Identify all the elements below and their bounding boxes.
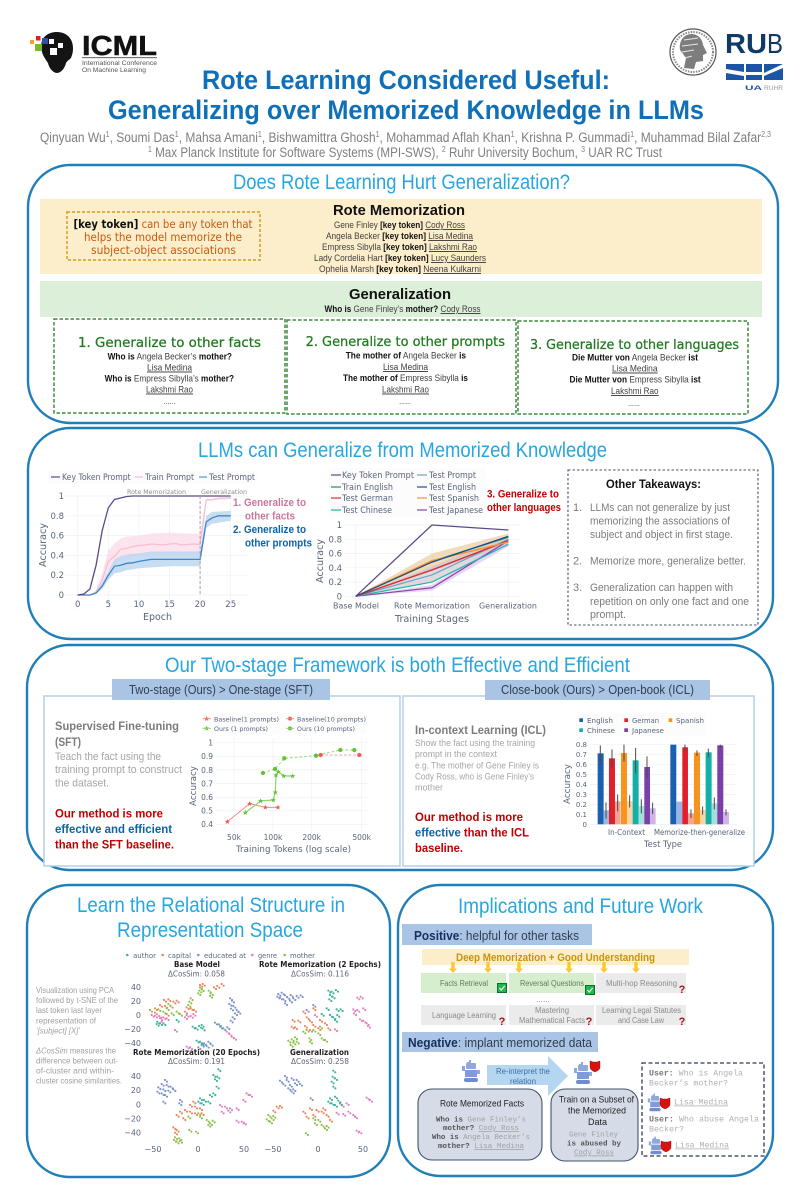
- box: generalize to other facts: Who is Angela Becker’s mother?: [108, 352, 232, 362]
- heading: [77, 894, 345, 942]
- chart: accuracy vs training tokens: 0.9: [201, 752, 213, 761]
- authors and affiliations: [40, 130, 771, 160]
- explanation text: of-cluster and within-: [36, 1066, 114, 1076]
- authors and affiliations: , Soumi Das: [110, 130, 175, 145]
- box: generalize to other languages: Lakshmi Rao: [611, 386, 659, 397]
- explanation text: ΔCosSim measures the: [35, 1046, 116, 1056]
- annotations: facts and prompts: other facts: [245, 510, 295, 522]
- authors and affiliations: , Krishna P. Gummadi: [515, 130, 630, 145]
- panel: relational structure: [27, 885, 390, 1177]
- chart: t-SNE generalization: Generalization: [290, 1048, 349, 1057]
- chart: t-SNE rote memorization 20 epochs: 40: [131, 1072, 141, 1081]
- chart: t-SNE rote memorization 20 epochs: 0: [195, 1145, 201, 1154]
- explanation text: representation of: [36, 1016, 97, 1026]
- box: other takeaways: LLMs can not generalize by just: [590, 502, 730, 514]
- callout: key token: [key token] can be any token that: [74, 217, 253, 231]
- panel: two-stage framework: [27, 645, 773, 870]
- generalization band: Who is Gene Finley’s mother? Cody Ross: [324, 304, 481, 315]
- heading: LLMs can Generalize from Memorized Knowledge: [198, 439, 607, 462]
- box: generalize to other languages: Die Mutter von Empress Sibylla ist: [570, 374, 701, 386]
- sub-panel: ICL comparison: Our method is more: [415, 810, 523, 824]
- legend: t-SNE relations: author: [133, 952, 156, 960]
- band: deep memorization: [422, 949, 689, 965]
- box: generalize to other prompts: 2. Generalize to other prompts: [306, 335, 505, 350]
- bubble: train on a subset: is abused by: [567, 1140, 621, 1148]
- generalization band: Generalization: [349, 286, 451, 303]
- explanation text: followed by t-SNE of the: [36, 995, 118, 1005]
- logo: RUB UA Ruhr: B: [767, 28, 783, 59]
- chart: accuracy vs training tokens: Ours (1 prompts): [214, 725, 268, 733]
- explanation text: [35, 985, 122, 1086]
- authors and affiliations: Ruhr University Bochum,: [446, 145, 581, 160]
- bubble: train on a subset: the Memorized: [568, 1106, 626, 1116]
- chart: accuracy vs training tokens: 1: [208, 738, 213, 748]
- chart: accuracy by training stage: 0: [337, 592, 342, 602]
- chart: accuracy by training stage: Generalization: [479, 602, 537, 610]
- box: generalize to other facts: Who is Empress Sibylla’s mother?: [105, 374, 234, 384]
- authors and affiliations: 3: [581, 145, 585, 154]
- bubble: rote memorized facts: Who is Angela Becker’s: [432, 1134, 530, 1142]
- legend: t-SNE relations: [126, 952, 315, 960]
- chart: t-SNE generalization: 50: [358, 1145, 368, 1154]
- chart: accuracy by epoch: 0.6: [50, 532, 64, 542]
- task grid: Mathematical Facts: [519, 1016, 585, 1025]
- generalization band: [40, 281, 762, 317]
- rote memorization band: Angela Becker [key token] Lisa Medina: [326, 231, 474, 242]
- chart: accuracy by training stage: Test Japanese: [428, 506, 483, 516]
- annotations: facts and prompts: 2. Generalize to: [233, 524, 306, 536]
- explanation text: Visualization using PCA: [36, 985, 114, 995]
- arrow: re-interpret the relation: Re-interpret the: [496, 1067, 551, 1076]
- rote memorization band: Rote Memorization: [333, 202, 465, 219]
- legend: t-SNE relations: capital: [168, 952, 191, 960]
- authors and affiliations: 2,3: [761, 130, 771, 139]
- sub-panel: SFT comparison: Supervised Fine-tuning: [55, 719, 179, 733]
- chart: accuracy by epoch: 1: [59, 492, 64, 502]
- heading: Representation Space: [117, 919, 303, 942]
- chart: accuracy by epoch: Accuracy: [38, 523, 49, 567]
- box: generalize to other prompts: The mother of Empress Sibylla is: [343, 373, 468, 384]
- chart: accuracy vs training tokens: Ours (10 prompts): [297, 725, 355, 733]
- box: other takeaways: memorizing the associations of: [590, 516, 731, 528]
- box: generalize to other prompts: Lisa Medina: [383, 362, 429, 373]
- chart: accuracy by training stage: Test German: [341, 494, 393, 504]
- chart: accuracy by epoch: 0.2: [50, 571, 64, 581]
- chart: accuracy by epoch: 10: [133, 600, 144, 610]
- chart: accuracy vs training tokens: 0.7: [201, 780, 213, 788]
- sub-panel: SFT comparison: training prompt to construct: [55, 764, 182, 776]
- authors and affiliations: 1: [630, 130, 635, 139]
- box: other takeaways: 3.: [573, 582, 582, 594]
- chart: accuracy by test type: German: [632, 717, 659, 725]
- chart: t-SNE rote memorization 20 epochs: [124, 1048, 260, 1154]
- chart: accuracy by training stage: 0.8: [328, 535, 342, 545]
- chart: accuracy vs training tokens: Accuracy: [189, 765, 199, 806]
- title: Rote Learning Considered Useful:: [202, 65, 610, 95]
- chart: t-SNE base model: Base Model: [174, 960, 220, 969]
- rote memorization band: Ophelia Marsh [key token] Neena Kulkarni: [319, 264, 481, 275]
- sub-panel: ICL comparison: e.g. The mother of Gene Finley is: [415, 760, 539, 772]
- box: example dialogue: User: Who is Angela: [649, 1070, 743, 1078]
- chart: accuracy vs training tokens: Training Tokens (log scale): [235, 845, 351, 855]
- arrows: yellow down: [449, 962, 640, 973]
- chart: t-SNE rote memorization 20 epochs: 20: [131, 1086, 141, 1095]
- chart: accuracy vs training tokens: Baseline(1 prompts): [214, 716, 279, 724]
- chart: t-SNE rote memorization 20 epochs: 0: [136, 1100, 141, 1110]
- callout: key token: subject-object associations: [91, 243, 236, 257]
- chart: accuracy by epoch: 25: [225, 600, 236, 610]
- chart: accuracy vs training tokens: [189, 713, 372, 855]
- box: generalize to other languages: 3. Generalize to other languages: [530, 338, 739, 353]
- box: other takeaways: Memorize more, generalize better.: [590, 556, 746, 568]
- chart: accuracy vs training tokens: 0.6: [201, 793, 213, 802]
- chart: accuracy by training stage: 0.6: [328, 550, 342, 560]
- explanation text: cluster cosine similarities.: [36, 1076, 122, 1086]
- arrow: re-interpret the relation: relation: [510, 1077, 536, 1086]
- callout: key token: [67, 212, 260, 260]
- rote memorization band: [40, 199, 762, 275]
- task grid: Multi-hop Reasoning: [606, 979, 677, 988]
- logo: RUB UA Ruhr: RU: [725, 28, 767, 59]
- box: generalize to other prompts: The mother of Angela Becker is: [346, 350, 466, 362]
- authors and affiliations: 2: [442, 145, 446, 154]
- chart: accuracy by test type: 0: [583, 821, 587, 829]
- chart: t-SNE rote memorization 2 epochs: Rote Memorization (2 Epochs): [259, 960, 381, 969]
- task grid: Facts Retrieval: [440, 979, 488, 988]
- chart: t-SNE generalization: −50: [265, 1145, 281, 1154]
- chart: accuracy by epoch: Train Prompt: [144, 473, 195, 483]
- title: [108, 65, 704, 125]
- heading: Learn the Relational Structure in: [77, 894, 345, 917]
- chart: t-SNE base model: 0: [136, 1011, 141, 1020]
- chart: accuracy by epoch: Generalization: [201, 489, 247, 496]
- chart: accuracy by test type: 0.1: [576, 811, 587, 819]
- annotations: facts and prompts: [233, 497, 312, 550]
- chart: accuracy by test type: [563, 713, 745, 850]
- tab: positive: [402, 924, 592, 945]
- box: other takeaways: subject and object in first stage.: [590, 529, 733, 541]
- chart: t-SNE rote memorization 20 epochs: −40: [124, 1128, 141, 1138]
- logo: RUB UA Ruhr: UA: [745, 85, 763, 92]
- authors and affiliations: Qinyuan Wu: [40, 130, 114, 145]
- sub-panel: SFT comparison: (SFT): [55, 735, 81, 749]
- chart: t-SNE base model: −20: [124, 1025, 141, 1034]
- chart: accuracy by epoch: Epoch: [143, 612, 172, 623]
- chart: accuracy by epoch: Test Prompt: [208, 473, 256, 483]
- chart: accuracy by training stage: Test Prompt: [428, 471, 477, 481]
- chart: accuracy by epoch: 0: [59, 591, 64, 601]
- box: example dialogue: User: Who abuse Angela: [649, 1116, 759, 1124]
- logo: Max Planck: [670, 29, 716, 75]
- box: example dialogue: [642, 1063, 764, 1156]
- annotations: facts and prompts: other prompts: [245, 538, 312, 550]
- chart: accuracy by training stage: Test Chinese: [341, 506, 392, 516]
- chart: accuracy by training stage: Training Stages: [394, 614, 469, 625]
- logo: ICML: International Conference: [82, 60, 157, 67]
- bubble: rote memorized facts: Rote Memorized Facts: [440, 1098, 524, 1110]
- title: Generalizing over Memorized Knowledge in LLMs: [108, 95, 704, 125]
- annotation: languages: other languages: [487, 502, 561, 514]
- sub-panel: ICL comparison: mother: [415, 782, 443, 794]
- tab: negative: Negative: implant memorized data: [408, 1035, 593, 1050]
- box: generalize to other facts: Lisa Medina: [147, 362, 193, 374]
- bubble: rote memorized facts: mother? Cody Ross: [443, 1125, 519, 1133]
- bubble: rote memorized facts: Who is Gene Finley’s: [436, 1116, 526, 1124]
- chart: accuracy by test type: Memorize-then-generalize: [654, 828, 745, 837]
- chart: t-SNE base model: −40: [124, 1039, 141, 1048]
- chart: accuracy by epoch: 5: [106, 600, 111, 610]
- task grid: Language Learning: [432, 1011, 496, 1020]
- authors and affiliations: 1: [511, 130, 515, 139]
- chart: accuracy by test type: Accuracy: [563, 763, 573, 804]
- sub-panel: ICL comparison: Close-book (Ours) > Open-book (ICL): [501, 683, 694, 697]
- bubble: train on a subset: Gene Finley: [569, 1132, 618, 1140]
- authors and affiliations: 1: [175, 130, 179, 139]
- authors and affiliations: 1: [258, 130, 262, 139]
- sub-panel: ICL comparison: baseline.: [415, 841, 463, 855]
- chart: t-SNE base model: [124, 960, 240, 1049]
- chart: accuracy by training stage: Key Token Prompt: [342, 471, 415, 481]
- chart: accuracy vs training tokens: 200k: [302, 833, 322, 842]
- bubble: train on a subset: [551, 1089, 638, 1161]
- sub-panel: ICL comparison: In-context Learning (ICL): [415, 723, 546, 737]
- chart: accuracy by test type: Japanese: [631, 727, 664, 735]
- explanation text: difference between out-: [36, 1056, 118, 1066]
- sub-panel: ICL comparison: [403, 680, 754, 866]
- sub-panel: SFT comparison: [44, 679, 400, 866]
- chart: accuracy vs training tokens: 0.8: [201, 766, 213, 775]
- legend: t-SNE relations: educated at: [204, 952, 246, 960]
- authors and affiliations: Max Planck Institute for Software Systems (MPI-SWS),: [152, 145, 442, 160]
- authors and affiliations: 1: [148, 145, 152, 154]
- chart: t-SNE rote memorization 20 epochs: ΔCosSim: 0.191: [168, 1057, 225, 1066]
- panel: does rote learning hurt generalization: [28, 165, 778, 423]
- annotation: languages: 3. Generalize to: [487, 488, 559, 500]
- logo: ICML: [30, 30, 157, 74]
- chart: t-SNE base model: 20: [131, 997, 141, 1006]
- box: example dialogue: Lisa Medina: [674, 1098, 728, 1108]
- heading: Implications and Future Work: [458, 895, 703, 918]
- chart: accuracy vs training tokens: 0.4: [201, 820, 213, 829]
- chart: accuracy by epoch: 15: [164, 600, 175, 610]
- authors and affiliations: 1: [106, 130, 110, 139]
- chart: accuracy by epoch: 0: [75, 600, 80, 610]
- box: generalize to other facts: ……: [163, 396, 176, 407]
- box: generalize to other prompts: ……: [399, 396, 411, 407]
- sub-panel: SFT comparison: Our method is more: [55, 806, 163, 820]
- task grid: Mastering: [535, 1006, 569, 1015]
- box: generalize to other languages: Die Mutter von Angela Becker ist: [572, 352, 699, 364]
- explanation text: ‘[subject] [X]’: [36, 1026, 80, 1036]
- task grid: and Case Law: [618, 1016, 664, 1025]
- sub-panel: SFT comparison: effective and efficient: [55, 822, 172, 836]
- explanation text: last token last layer: [36, 1005, 102, 1015]
- chart: accuracy vs training tokens: 500k: [352, 833, 372, 842]
- bubble: train on a subset: Data: [588, 1117, 608, 1128]
- task grid: Reversal Questions: [520, 979, 584, 988]
- chart: accuracy by training stage: Base Model: [333, 602, 379, 610]
- arrow: re-interpret the relation: [487, 1056, 568, 1096]
- band: deep memorization: Deep Memorization + Good Understanding: [456, 952, 655, 964]
- sub-panel: SFT comparison: Two-stage (Ours) > One-stage (SFT): [129, 683, 313, 697]
- chart: accuracy by training stage: Test English: [428, 483, 476, 493]
- chart: accuracy by training stage: 0.2: [328, 578, 342, 588]
- panel: LLMs can generalize: [28, 428, 773, 639]
- authors and affiliations: UAR RC Trust: [585, 145, 662, 160]
- sub-panel: ICL comparison: prompt in the context: [415, 749, 497, 760]
- sub-panel: ICL comparison: effective than the ICL: [415, 826, 529, 840]
- sub-panel: SFT comparison: than the SFT baseline.: [55, 838, 174, 852]
- bubble: train on a subset: Train on a Subset of: [559, 1094, 634, 1106]
- chart: t-SNE rote memorization 2 epochs: ΔCosSim: 0.116: [291, 970, 349, 978]
- chart: accuracy by training stage: [315, 468, 537, 625]
- chart: accuracy by training stage: Train English: [341, 483, 393, 493]
- chart: accuracy by epoch: 0.8: [50, 512, 64, 522]
- sub-panel: SFT comparison: the dataset.: [55, 778, 109, 790]
- chart: t-SNE generalization: [265, 1048, 372, 1154]
- sub-panel: SFT comparison: Teach the fact using the: [55, 751, 161, 763]
- box: generalize to other languages: [518, 321, 748, 414]
- authors and affiliations: , Mohammad Aflah Khan: [380, 130, 511, 145]
- chart: accuracy by epoch: Key Token Prompt: [62, 473, 131, 483]
- box: other takeaways: Generalization can happen with: [590, 582, 733, 594]
- task grid: ......: [536, 995, 550, 1004]
- box: generalize to other prompts: [287, 320, 516, 414]
- heading: Our Two-stage Framework is both Effective and Efficient: [165, 654, 630, 677]
- chart: accuracy by training stage: Test Spanish: [428, 494, 479, 504]
- chart: accuracy by test type: 0.4: [576, 781, 588, 789]
- chart: t-SNE generalization: 0: [315, 1145, 321, 1154]
- chart: accuracy by training stage: Rote Memorization: [394, 602, 470, 610]
- heading: Does Rote Learning Hurt Generalization?: [233, 171, 570, 194]
- chart: t-SNE rote memorization 20 epochs: −20: [124, 1114, 141, 1124]
- box: generalize to other languages: Lisa Medina: [612, 364, 658, 374]
- authors and affiliations: , Mahsa Amani: [179, 130, 258, 145]
- chart: accuracy by test type: 0.6: [576, 761, 588, 769]
- sub-panel: ICL comparison: Show the fact using the training: [415, 738, 535, 749]
- box: generalize to other facts: Lakshmi Rao: [146, 384, 193, 396]
- annotation: languages: [487, 488, 561, 514]
- rote memorization band: Empress Sibylla [key token] Lakshmi Rao: [322, 242, 477, 253]
- task grid: [421, 973, 686, 1028]
- chart: accuracy vs training tokens: Baseline(10 prompts): [297, 716, 366, 724]
- legend: t-SNE relations: mother: [290, 952, 315, 960]
- box: other takeaways: prompt.: [590, 609, 626, 621]
- icon: robot: [462, 1060, 480, 1082]
- icon: compromised robot: [574, 1061, 600, 1084]
- box: other takeaways: [568, 470, 758, 625]
- annotations: facts and prompts: 1. Generalize to: [233, 497, 306, 509]
- chart: accuracy by test type: In-Context: [608, 828, 645, 837]
- chart: t-SNE rote memorization 20 epochs: Rote Memorization (20 Epochs): [133, 1048, 260, 1057]
- chart: t-SNE base model: 40: [131, 983, 141, 992]
- box: generalize to other facts: 1. Generalize to other facts: [78, 336, 261, 351]
- chart: t-SNE base model: ΔCosSim: 0.058: [168, 970, 225, 978]
- chart: accuracy vs training tokens: 100k: [264, 833, 283, 842]
- legend: t-SNE relations: genre: [258, 952, 277, 960]
- chart: t-SNE rote memorization 20 epochs: −50: [145, 1145, 161, 1154]
- chart: accuracy by test type: 0.5: [576, 771, 587, 779]
- box: generalize to other facts: [54, 319, 285, 413]
- logo: RUB UA Ruhr: [725, 28, 783, 92]
- chart: accuracy by test type: Chinese: [587, 727, 615, 735]
- chart: accuracy by training stage: 0.4: [328, 564, 342, 574]
- chart: accuracy by test type: 0.3: [576, 791, 587, 799]
- chart: accuracy by test type: English: [587, 717, 613, 725]
- chart: accuracy vs training tokens: 0.5: [201, 806, 213, 816]
- rote memorization band: Gene Finley [key token] Cody Ross: [334, 220, 465, 231]
- box: generalize to other languages: ……: [628, 398, 640, 409]
- logo: ICML: On Machine Learning: [82, 67, 146, 74]
- chart: accuracy by test type: 0.7: [576, 751, 587, 759]
- chart: t-SNE rote memorization 20 epochs: 50: [239, 1145, 249, 1154]
- bubble: rote memorized facts: mother? Lisa Medina: [438, 1143, 524, 1151]
- box: example dialogue: Lisa Medina: [675, 1142, 729, 1150]
- task grid: Learning Legal Statutes: [602, 1006, 681, 1015]
- logo: ICML: ICML: [82, 30, 157, 61]
- box: other takeaways: Other Takeaways:: [606, 477, 701, 491]
- box: generalize to other prompts: Lakshmi Rao: [382, 384, 429, 396]
- box: other takeaways: 2.: [573, 556, 582, 568]
- logo: RUB UA Ruhr: RUHR: [764, 85, 783, 92]
- chart: accuracy by test type: 0.8: [576, 741, 587, 749]
- chart: accuracy by test type: Spanish: [676, 717, 704, 725]
- chart: accuracy by training stage: 1: [337, 521, 342, 531]
- chart: accuracy by test type: 0.2: [576, 801, 587, 809]
- sub-panel: ICL comparison: Cody Ross, who is Gene Finley’s: [415, 772, 534, 782]
- box: example dialogue: Becker?: [649, 1126, 684, 1134]
- chart: accuracy by epoch: [38, 471, 257, 623]
- box: other takeaways: 1.: [573, 502, 582, 514]
- authors and affiliations: 1: [376, 130, 380, 139]
- bubble: rote memorized facts: [418, 1089, 542, 1160]
- box: example dialogue: Becker’s mother?: [649, 1080, 728, 1088]
- chart: accuracy by epoch: 0.4: [50, 552, 64, 562]
- authors and affiliations: , Muhammad Bilal Zafar: [634, 130, 762, 145]
- chart: t-SNE rote memorization 2 epochs: [259, 960, 381, 1047]
- panel: implications and future work: [398, 885, 773, 1176]
- bubble: train on a subset: Cody Ross: [574, 1150, 614, 1158]
- box: other takeaways: repetition on only one fact and one: [590, 596, 749, 608]
- chart: t-SNE generalization: ΔCosSim: 0.258: [291, 1057, 349, 1066]
- callout: key token: helps the model memorize the: [84, 230, 242, 244]
- chart: accuracy by training stage: Accuracy: [315, 539, 326, 583]
- chart: accuracy by epoch: Rote Memorization: [127, 489, 186, 496]
- chart: accuracy by epoch: 20: [195, 600, 206, 610]
- chart: accuracy vs training tokens: 50k: [227, 833, 242, 842]
- chart: accuracy by test type: Test Type: [643, 840, 682, 850]
- tab: positive: Positive: helpful for other tasks: [414, 928, 579, 943]
- rote memorization band: Lady Cordelia Hart [key token] Lucy Saunders: [314, 253, 486, 264]
- authors and affiliations: , Bishwamittra Ghosh: [262, 130, 376, 145]
